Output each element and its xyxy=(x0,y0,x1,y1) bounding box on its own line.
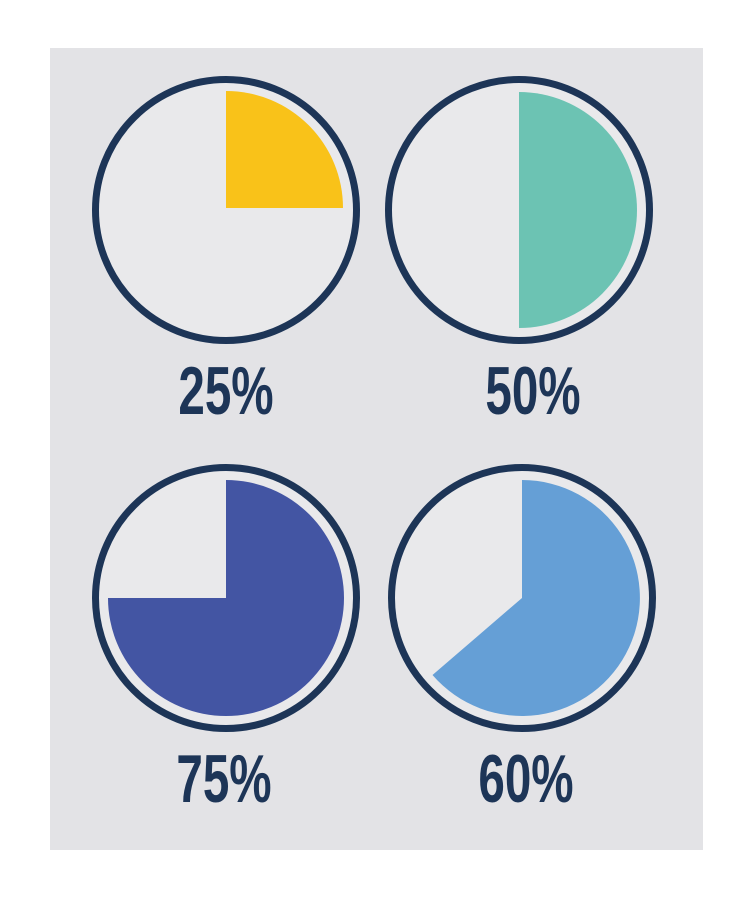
chart: 25% xyxy=(96,80,356,340)
label: 50%: 50% xyxy=(485,354,581,429)
panel: background xyxy=(50,48,703,850)
label: 25%: 25% xyxy=(178,354,274,429)
chart: 60% xyxy=(392,468,652,728)
chart: 75% xyxy=(96,468,356,728)
chart: 50% xyxy=(388,80,650,340)
label: 60%: 60% xyxy=(478,742,574,817)
label: 75%: 75% xyxy=(176,742,272,817)
